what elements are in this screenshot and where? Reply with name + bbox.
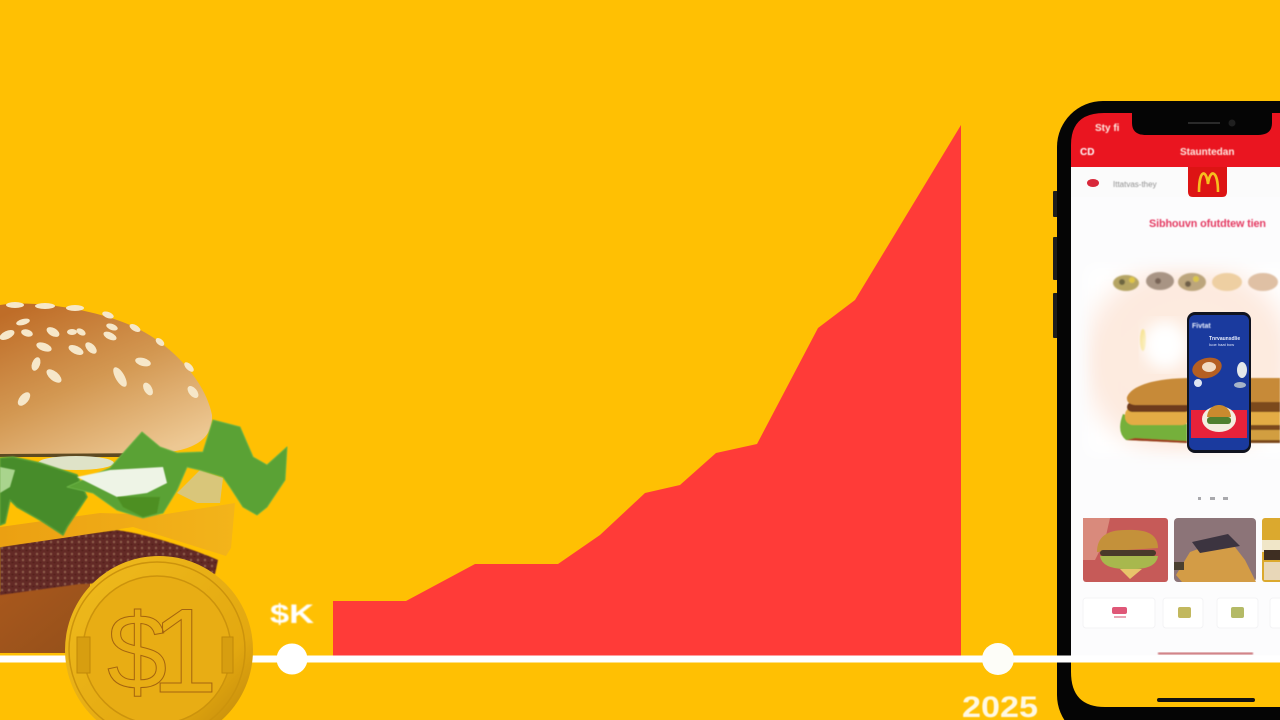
nested food highlight (1202, 362, 1216, 372)
hero flame accent (1140, 329, 1146, 351)
coin ring: outer (69, 562, 245, 720)
nested food (1190, 354, 1224, 382)
thumbnail: third item (1262, 518, 1280, 582)
phone body (1057, 101, 1280, 720)
quick action: four (1270, 598, 1280, 628)
under-bun shadow (0, 451, 125, 457)
coin ridge: right (222, 637, 233, 673)
coin digit: 1 (151, 584, 218, 718)
sesame seeds (0, 302, 201, 408)
lettuce: right (67, 420, 287, 518)
quick action: one (1083, 598, 1155, 628)
page heading: Sibhouvn ofutdtew tien (1149, 218, 1266, 230)
app white page (1071, 196, 1280, 656)
lower screen (1071, 660, 1280, 707)
lettuce: left (0, 457, 87, 535)
status time: Sty fi (1095, 123, 1120, 134)
dollar coin (65, 556, 253, 720)
bottom bun (0, 582, 90, 653)
coin ring: inner (83, 576, 231, 720)
hero toppings row (1113, 272, 1278, 291)
timeline node: start (276, 644, 308, 674)
thumbnail: fries (1174, 518, 1256, 582)
side buttons (1053, 191, 1058, 338)
thumbnail: burger (1083, 518, 1168, 582)
coin disc (65, 556, 253, 720)
start label: $K (270, 599, 315, 629)
nested phone body (1187, 312, 1251, 453)
nested title: Fivtat (1192, 323, 1211, 330)
quick action: two (1163, 598, 1203, 628)
header title: Stauntedan (1180, 147, 1234, 158)
lettuce: highlight (0, 467, 15, 493)
area chart (333, 125, 961, 656)
hero glow (1143, 321, 1187, 369)
notch camera (1228, 120, 1236, 126)
nested subtitle: Tnrvaunsdlie (1209, 336, 1240, 342)
tab label: Ittatvas-they (1113, 180, 1157, 189)
cheese slice (0, 503, 235, 556)
nested garnish (1194, 379, 1202, 387)
coin denomination: $ (107, 591, 167, 712)
burger illustration (0, 302, 287, 720)
nested garnish right (1234, 382, 1246, 388)
nested caption: Iuoe haat bow (1209, 342, 1234, 347)
notch speaker (1188, 122, 1220, 124)
home indicator (1157, 698, 1255, 702)
smartphone mockup (1040, 101, 1280, 720)
hero burger: left (1120, 378, 1190, 443)
tab icon (1087, 179, 1099, 187)
nested red band (1191, 410, 1247, 438)
lettuce: white rib (77, 467, 167, 497)
carousel dots (1198, 497, 1228, 500)
timeline node: 2025 (982, 643, 1014, 675)
logo tile (1188, 167, 1227, 197)
tab bar (1071, 167, 1280, 197)
top bun (0, 304, 212, 454)
patty (0, 530, 218, 595)
notch (1132, 108, 1272, 135)
nested burger (1202, 405, 1236, 432)
nested phone (1187, 312, 1251, 453)
app red header (1071, 113, 1280, 167)
nested toppings (1237, 362, 1247, 378)
header icon text: CD (1080, 147, 1094, 158)
golden arches logo (1199, 174, 1218, 192)
lettuce: fold (117, 497, 160, 517)
nested screen (1189, 315, 1249, 450)
hero burger: right (1250, 378, 1280, 443)
quick action: three (1217, 598, 1258, 628)
onion ring (38, 456, 114, 470)
timeline axis (0, 656, 1075, 662)
blurred footer strip (1158, 652, 1253, 654)
coin ridge: left (77, 637, 90, 673)
pickle (177, 470, 223, 503)
hero pink wash (1088, 268, 1280, 453)
white timeline over phone (1040, 656, 1280, 662)
